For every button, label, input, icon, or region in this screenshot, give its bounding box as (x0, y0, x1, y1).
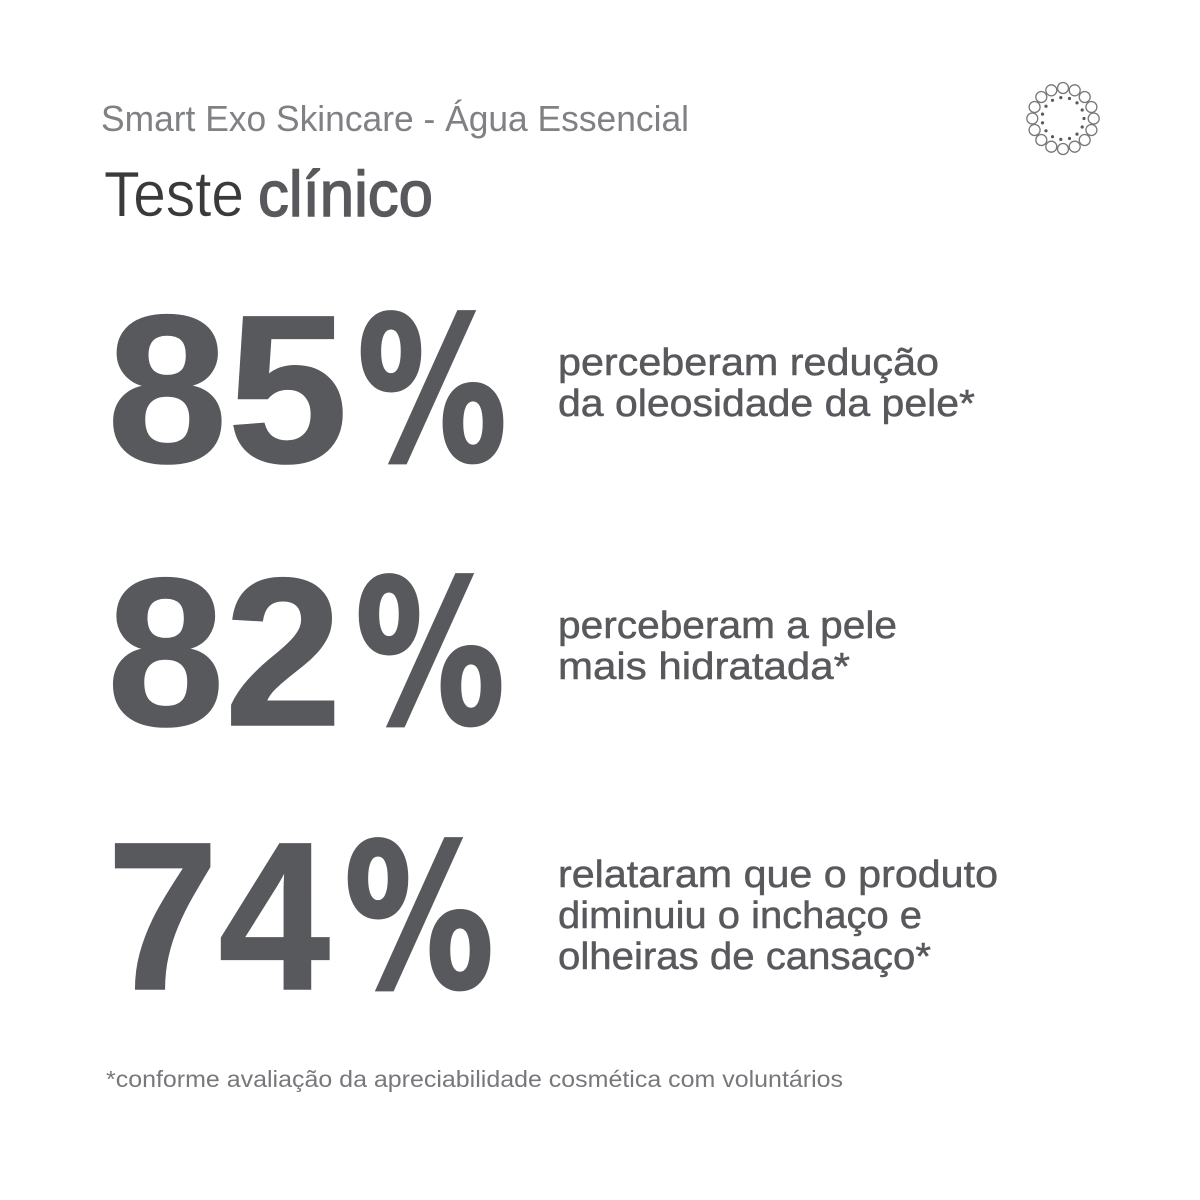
footnote: *conforme avaliação da apreciabilidade cosmética com voluntários (106, 1066, 843, 1092)
stat: 82%: 82 (107, 534, 342, 770)
text: 82% description: mais hidratada* (558, 646, 850, 688)
stat: 74% (107, 798, 494, 1035)
text: 85% description: da oleosidade da pele* (558, 383, 975, 425)
stat: 74%: 74 (107, 798, 330, 1034)
stat: 82% (107, 534, 505, 771)
text: 85% description (558, 342, 975, 425)
subtitle: Smart Exo Skincare - Água Essencial (101, 98, 689, 139)
text: 82% description (558, 605, 897, 688)
text: 74% description: olheiras de cansaço* (558, 936, 931, 978)
stat: 85%: 85 (107, 271, 348, 507)
icon: circular logo (1027, 82, 1099, 154)
title: clínico (258, 158, 433, 230)
text: 74% description: diminuiu o inchaço e (558, 895, 922, 937)
stat: 82%: % (355, 538, 505, 771)
stat: 74%: % (344, 802, 494, 1035)
stat: 85% (107, 271, 507, 508)
stat: 85%: % (357, 275, 507, 508)
text: 74% description: relataram que o produto (558, 854, 998, 896)
text: 74% description (558, 854, 998, 978)
title (104, 158, 433, 230)
text: 85% description: perceberam redução (558, 342, 939, 384)
title: Teste (104, 158, 244, 230)
text: 82% description: perceberam a pele (558, 605, 897, 647)
